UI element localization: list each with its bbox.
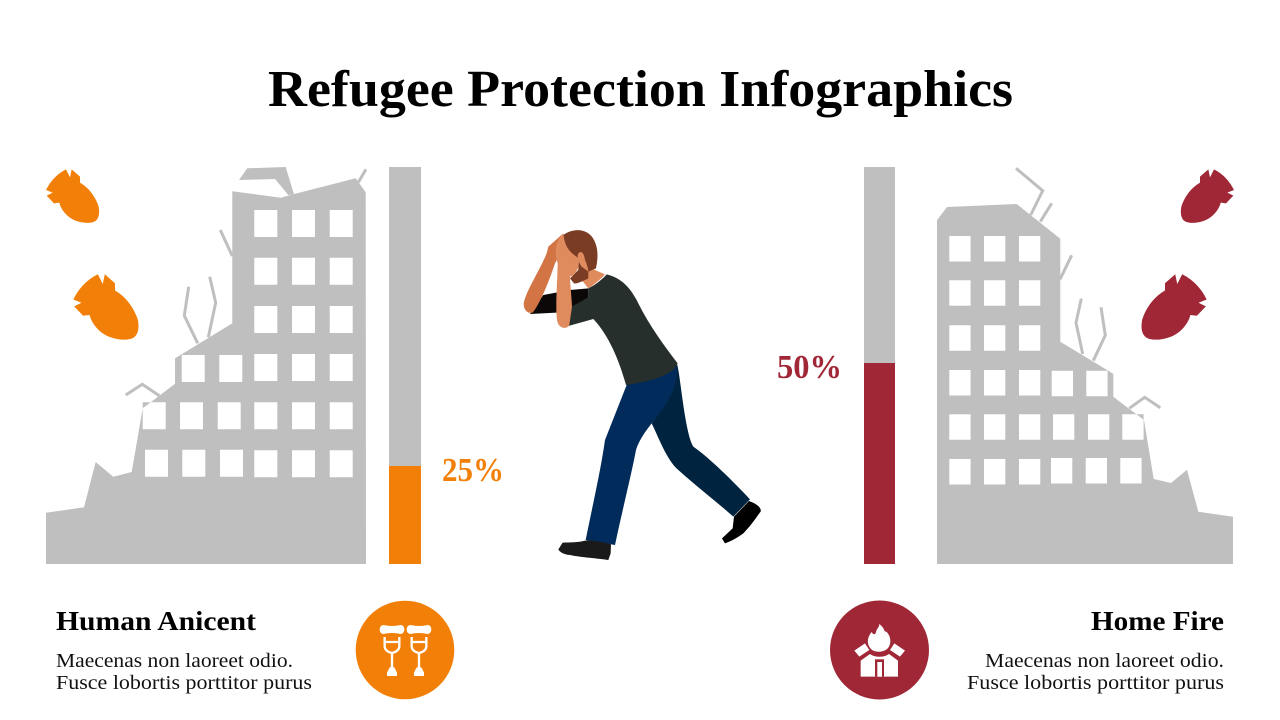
cracks on left building — [126, 169, 366, 396]
bar: right progress 50% — [864, 167, 895, 564]
icon: house on fire in red circle — [830, 600, 929, 700]
icon: small red bomb — [1181, 169, 1234, 223]
icon: crutches in orange circle — [356, 601, 454, 699]
right building silhouette — [937, 204, 1233, 564]
roof fragment — [239, 167, 294, 195]
icon: small orange bomb — [46, 169, 99, 223]
body text left: Maecenas non laoreet odio. — [56, 651, 293, 672]
icon: large orange bomb — [73, 274, 138, 340]
label: 50%: 50% — [777, 349, 842, 386]
body text right — [967, 651, 1224, 694]
panel: left bombed building — [46, 167, 366, 564]
heading: Human Anicent: Human Anicent — [56, 606, 256, 636]
left building silhouette — [46, 178, 366, 564]
icon: large red bomb — [1142, 274, 1207, 340]
body text right: Fusce lobortis porttitor purus — [967, 673, 1224, 694]
cracks on right building — [1016, 168, 1160, 408]
text block: Home Fire — [967, 606, 1224, 694]
body text right: Maecenas non laoreet odio. — [985, 651, 1224, 672]
man upper body — [524, 230, 678, 385]
panel: right bombed building — [937, 168, 1234, 564]
text block: Human Anicent — [56, 606, 312, 694]
man legs and shoes — [558, 364, 761, 560]
body text left: Fusce lobortis porttitor purus — [56, 673, 312, 694]
body text left — [56, 651, 312, 694]
title: Refugee Protection Infographics — [268, 61, 1013, 118]
bar: left progress 25% — [389, 167, 421, 564]
label: 25%: 25% — [442, 452, 504, 489]
figure: distressed man walking — [524, 230, 761, 560]
heading: Home Fire: Home Fire — [1091, 606, 1224, 636]
